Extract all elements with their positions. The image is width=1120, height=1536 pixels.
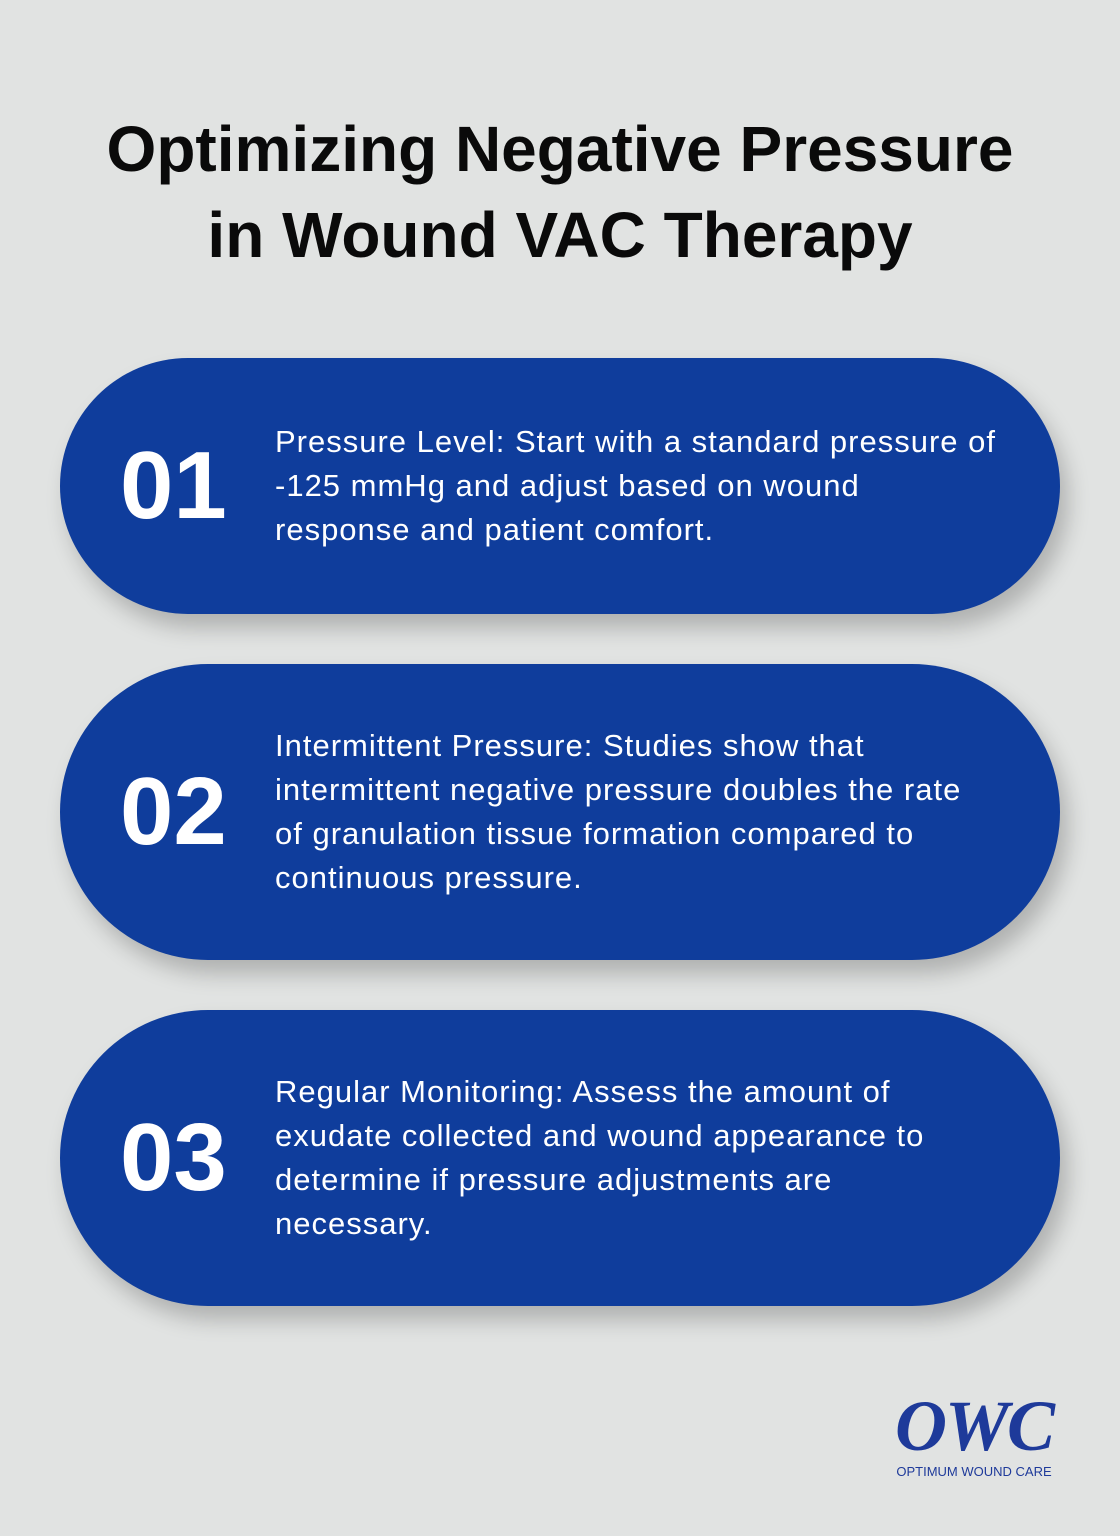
text: regular monitoring: necessary.	[275, 1206, 433, 1241]
text: intermittent pressure: continuous pressure.	[275, 860, 583, 895]
text: intermittent pressure	[275, 728, 961, 895]
text: regular monitoring: determine if pressure adjustments are	[275, 1162, 832, 1197]
title	[107, 113, 1013, 271]
text: intermittent pressure: Intermittent Pressure: Studies show that	[275, 728, 865, 763]
title: in Wound VAC Therapy	[207, 199, 913, 271]
text: intermittent pressure: of granulation tissue formation compared to	[275, 816, 914, 851]
logo: OWC	[895, 1386, 1053, 1466]
panel: step 03	[60, 1010, 1060, 1306]
text: intermittent pressure: intermittent negative pressure doubles the rate	[275, 772, 961, 807]
text: pressure level: Pressure Level: Start with a standard pressure of	[275, 424, 996, 459]
text: pressure level: response and patient comfort.	[275, 512, 714, 547]
text: pressure level: -125 mmHg and adjust based on wound	[275, 468, 860, 503]
number 02: 02	[120, 758, 227, 865]
number 03: 03	[120, 1104, 227, 1211]
number 01: 01	[120, 432, 227, 539]
text: regular monitoring	[275, 1074, 924, 1241]
text: pressure level	[275, 424, 996, 547]
panel: step 02	[60, 664, 1060, 960]
title: Optimizing Negative Pressure	[107, 113, 1013, 185]
text: regular monitoring: exudate collected and wound appearance to	[275, 1118, 924, 1153]
panel: step 01	[60, 358, 1060, 614]
logo: OPTIMUM WOUND CARE	[896, 1464, 1052, 1479]
text: regular monitoring: Regular Monitoring: Assess the amount of	[275, 1074, 891, 1109]
